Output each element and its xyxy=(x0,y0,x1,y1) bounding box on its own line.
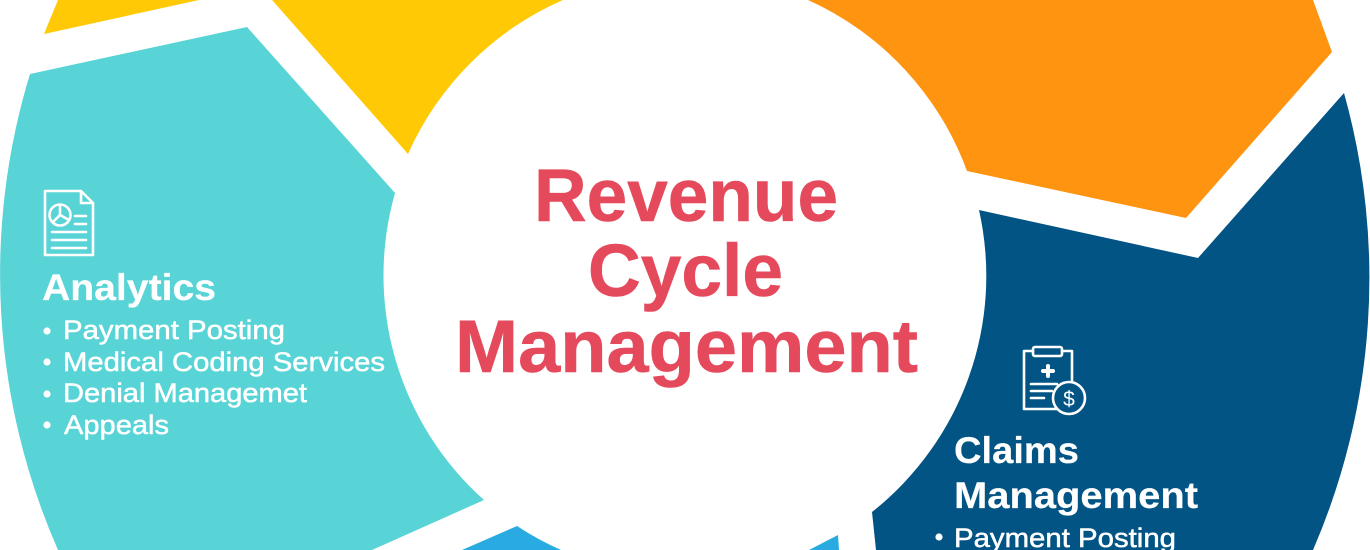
panel text: claims management: Claims xyxy=(954,430,1079,471)
panel text: analytics: Analytics xyxy=(42,267,216,308)
segment: yellow left fragment xyxy=(44,0,199,34)
panel text: claims management xyxy=(935,430,1198,550)
segment: claims management xyxy=(872,93,1369,550)
title: Management xyxy=(455,305,918,388)
title xyxy=(455,154,918,388)
title: Revenue xyxy=(534,154,838,237)
panel text: analytics: Payment Posting xyxy=(63,315,285,345)
panel text: analytics: Medical Coding Services xyxy=(63,347,385,377)
segment: yellow xyxy=(272,0,563,154)
segment: analytics xyxy=(0,27,484,550)
title: Cycle xyxy=(588,229,783,312)
segment: light blue bottom right xyxy=(809,535,839,550)
icon: report document xyxy=(45,191,93,255)
panel text: analytics: Denial Managemet xyxy=(63,378,308,408)
panel text: analytics xyxy=(42,267,385,440)
segment: orange xyxy=(808,0,1332,218)
segment: light blue bottom xyxy=(462,526,561,550)
icon: medical claim clipboard xyxy=(1024,347,1085,414)
panel text: claims management: Management xyxy=(954,475,1198,516)
icon: medical claim clipboard: $ xyxy=(1063,388,1075,411)
panel text: analytics: Appeals xyxy=(64,410,169,440)
